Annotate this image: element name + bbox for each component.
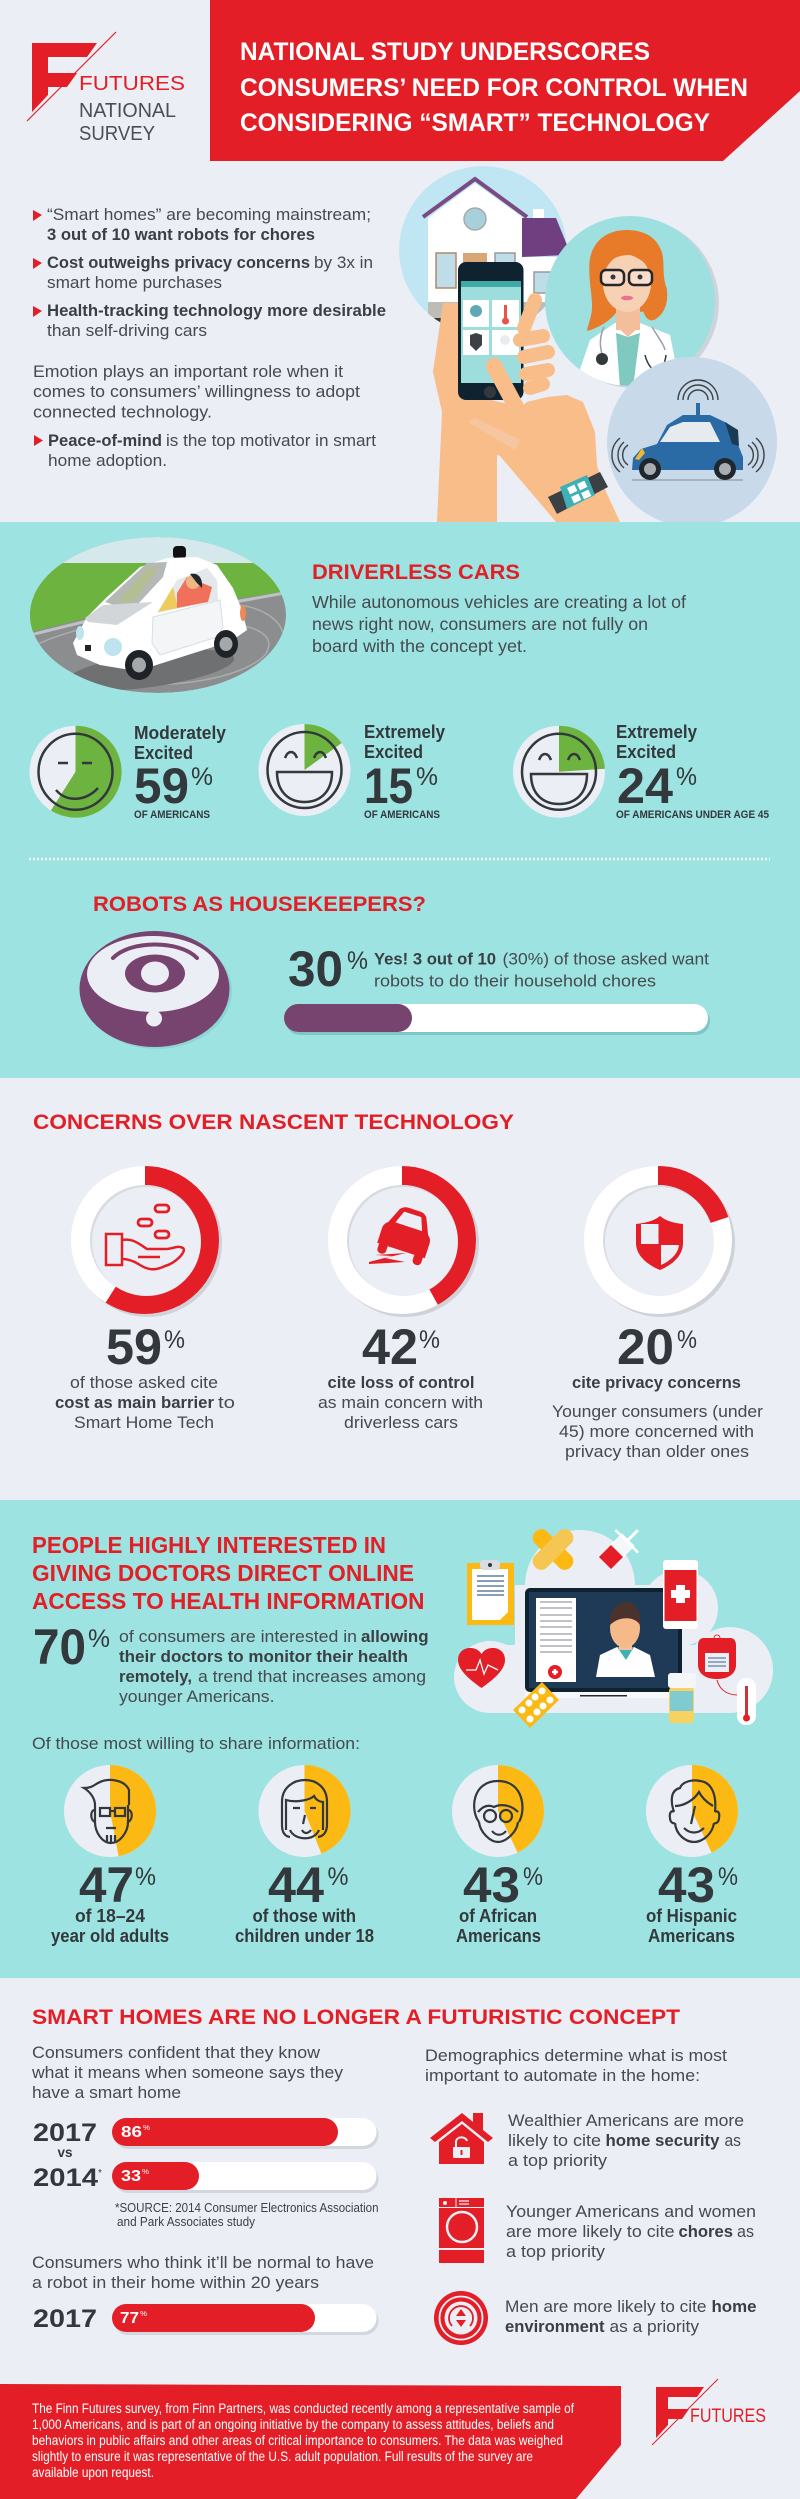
stat: 47% of 18-24: 47 <box>79 1857 134 1913</box>
bar: 2014 33%: * <box>98 2168 102 2179</box>
icon: home environment <box>434 2291 488 2345</box>
stat: 43% African Americans: % <box>523 1863 543 1891</box>
stat: 43% Hispanic Americans: 43 <box>658 1857 715 1913</box>
intro text block: home adoption. <box>48 451 167 470</box>
bar: 2017 86%: 86 <box>121 2124 142 2141</box>
stat: extremely excited under 45 24%: OF AMERICANS UNDER AGE 45 <box>616 809 769 821</box>
stat: 43% African Americans: Americans <box>456 1926 541 1946</box>
text: home security: Wealthier Americans are more <box>508 2111 744 2130</box>
bar: 2014 33% <box>33 2162 378 2193</box>
icon: African American man <box>474 1781 522 1842</box>
intro text block: Health-tracking technology more desirable <box>47 301 386 320</box>
bar: 2017 77% <box>33 2304 378 2335</box>
intro text block: smart home purchases <box>47 273 222 292</box>
heading: health: GIVING DOCTORS DIRECT ONLINE <box>32 1560 414 1586</box>
panel: footer methodology: slightly to ensure it was representative of the U.S. adult population. Full results of the survey are <box>32 2449 533 2464</box>
text: chores: as <box>737 2222 754 2241</box>
heading: health: PEOPLE HIGHLY INTERESTED IN <box>32 1532 386 1558</box>
panel: footer methodology: 1,000 Americans, and is part of an ongoing initiative by the company to assess attitudes, beliefs and <box>32 2417 554 2432</box>
panel: smart homes <box>31 2006 757 2345</box>
fingers over phone <box>494 300 548 418</box>
stat: 59% <box>55 1319 235 1432</box>
text: consumers confident: Consumers confident that they know <box>32 2043 321 2062</box>
stat: 47% of 18-24: year old adults <box>51 1926 169 1946</box>
stat: 30% robots <box>288 941 709 997</box>
text: home environment: as a priority <box>610 2317 699 2336</box>
intro text block: Cost outweighs privacy concerns <box>47 253 310 272</box>
laptop with doctor <box>525 1588 682 1698</box>
logo: Futures footer: FUTURES <box>690 2406 766 2427</box>
pill blister pack <box>513 1682 559 1728</box>
stat: extremely excited under 45 24%: Excited <box>616 742 676 762</box>
panel: footer methodology: The Finn Futures survey, from Finn Partners, was conducted recently among a representative sample of <box>32 2401 574 2416</box>
source note: *SOURCE: 2014 Consumer Electronics Association <box>115 2201 379 2215</box>
intro text block: than self-driving cars <box>47 321 207 340</box>
text: home environment: Men are more likely to cite <box>505 2297 706 2316</box>
bar: 2017 77%: 77 <box>120 2310 139 2327</box>
stat: 30% robots: robots to do their household chores <box>374 972 656 990</box>
stat: extremely excited under 45 24%: 24 <box>617 758 673 814</box>
heading: concerns: CONCERNS OVER NASCENT TECHNOLOGY <box>33 1111 514 1134</box>
intro text block <box>33 205 386 470</box>
stat: extremely excited under 45 24% <box>513 722 769 821</box>
stat: 47% of 18-24: % <box>135 1863 156 1891</box>
text: home security: as <box>724 2131 741 2150</box>
bar: 2017 86%: 2017 <box>33 2119 97 2147</box>
panel: header <box>27 0 800 161</box>
stat: 20%: 45) more concerned with <box>559 1422 754 1441</box>
icon: Hispanic man <box>670 1780 719 1842</box>
source note <box>115 2201 379 2229</box>
icon: bearded man <box>84 1780 132 1843</box>
stat: 70% consumers: allowing <box>361 1627 428 1646</box>
stat: 20%: cite privacy concerns <box>572 1373 741 1392</box>
text: home environment <box>505 2297 756 2336</box>
title banner: CONSUMERS’ NEED FOR CONTROL WHEN <box>240 74 748 102</box>
stat: 42%: 42 <box>362 1319 418 1375</box>
stat: 59%: 59 <box>106 1319 162 1375</box>
stat: extremely excited 15%: Excited <box>364 742 423 762</box>
clipboard <box>467 1560 514 1625</box>
stat: moderately excited 59% <box>30 723 226 821</box>
title banner: NATIONAL STUDY UNDERSCORES <box>240 38 650 66</box>
illustration: telehealth cloud <box>454 1519 773 1728</box>
heading: health: ACCESS TO HEALTH INFORMATION <box>32 1588 424 1614</box>
stat: 43% African Americans: of African <box>459 1906 537 1926</box>
title banner <box>210 0 800 161</box>
intro text block: Emotion plays an important role when it <box>33 362 343 381</box>
text: robot in 20 years: Consumers who think it’ll be normal to have <box>32 2253 374 2272</box>
stat: 44% with children <box>235 1765 374 1946</box>
text: home security <box>508 2111 744 2170</box>
stat: 70% consumers: 70 <box>33 1619 86 1675</box>
logo: Futures National Survey <box>27 32 185 145</box>
ring chart: 42% loss of control <box>328 1166 479 1317</box>
stat: 47% of 18-24: of 18–24 <box>75 1906 145 1926</box>
panel: driverless cars and robots <box>0 522 800 1078</box>
stat: moderately excited 59%: Excited <box>134 743 193 763</box>
stat: 44% with children: of those with <box>252 1906 356 1926</box>
heading: driverless cars: DRIVERLESS CARS <box>312 561 520 584</box>
stat: 42%: as main concern with <box>318 1393 483 1412</box>
stat: 44% with children: % <box>328 1863 348 1891</box>
stat: 70% consumers: younger Americans. <box>119 1687 274 1706</box>
thermometer <box>737 1678 756 1725</box>
icon: woman <box>282 1780 327 1838</box>
panel: footer methodology: behaviors in public affairs and other areas of critical importance to consumers. The data was weighed <box>32 2433 563 2448</box>
stat: 20%: privacy than older ones <box>565 1442 749 1461</box>
intro text block: is the top motivator in smart <box>166 431 376 450</box>
icon: shield <box>636 1216 683 1270</box>
stat: 42%: driverless cars <box>344 1413 458 1432</box>
progress bar: 30% <box>284 1004 710 1035</box>
stat: 70% consumers: of consumers are interested in <box>119 1627 357 1646</box>
heading: robots as housekeepers: ROBOTS AS HOUSEKEEPERS? <box>93 893 426 916</box>
bar: 2014 33%: 2014 <box>33 2164 98 2192</box>
bar: 2017 86%: % <box>143 2125 150 2132</box>
text: demographics: Demographics determine what is most <box>425 2046 727 2065</box>
stat: 70% consumers <box>33 1619 428 1706</box>
stat: 20%: Younger consumers (under <box>552 1402 763 1421</box>
stat: 70% consumers: remotely, <box>119 1667 192 1686</box>
stat: extremely excited under 45 24%: Extremely <box>616 722 697 742</box>
house circle <box>399 166 568 334</box>
text: home security: home security <box>606 2131 720 2150</box>
icon: washing machine <box>439 2198 484 2263</box>
stat: 30% robots: (30%) of those asked want <box>502 950 709 968</box>
stat: 70% consumers: a trend that increases among <box>198 1667 426 1686</box>
stat: moderately excited 59%: % <box>191 763 213 791</box>
stat: moderately excited 59%: OF AMERICANS <box>134 809 210 821</box>
phone: health app <box>663 1560 698 1629</box>
heart with pulse <box>458 1648 505 1688</box>
ring chart: 59% cost <box>71 1166 222 1317</box>
illustration: self-driving car <box>28 535 290 699</box>
icon: skidding car <box>369 1202 438 1267</box>
text: demographics: important to automate in the home: <box>425 2066 700 2085</box>
bar: 2017 77%: 2017 <box>33 2305 97 2333</box>
stat: extremely excited 15%: OF AMERICANS <box>364 809 440 821</box>
bar: 2014 33%: % <box>142 2169 149 2176</box>
text: chores: Younger Americans and women <box>506 2202 756 2221</box>
panel: concerns over nascent technology <box>33 1111 763 1461</box>
stat: 43% Hispanic Americans: Americans <box>648 1926 735 1946</box>
stat: 42%: cite loss of control <box>328 1373 474 1392</box>
intro text block: comes to consumers’ willingness to adopt <box>33 382 360 401</box>
stat: extremely excited under 45 24%: % <box>676 763 697 791</box>
text: of those most willing: Of those most willing to share information: <box>32 1734 360 1753</box>
intro text block: by 3x in <box>314 253 373 272</box>
stat: 42%: % <box>419 1326 440 1354</box>
smartwatch <box>548 472 608 514</box>
driverless cars description: While autonomous vehicles are creating a lot of <box>312 592 686 612</box>
heading: smart homes: SMART HOMES ARE NO LONGER A FUTURISTIC CONCEPT <box>32 2006 680 2029</box>
text: chores: are more likely to cite <box>506 2222 674 2241</box>
stat: 47% of 18-24 <box>51 1765 169 1946</box>
heading: health <box>32 1532 424 1614</box>
stat: 59%: Smart Home Tech <box>74 1413 214 1432</box>
intro text block: 3 out of 10 want robots for chores <box>47 225 315 244</box>
text: home security: a top priority <box>508 2151 608 2170</box>
illustration: connected life (house, doctor, car, hands) <box>399 166 781 528</box>
text: robot in 20 years <box>32 2253 374 2292</box>
stat: 59%: to <box>218 1393 235 1412</box>
text: consumers confident <box>31 2043 344 2102</box>
panel: footer methodology <box>0 2384 621 2499</box>
blood bag and tube <box>698 1635 738 1695</box>
intro text block: “Smart homes” are becoming mainstream; <box>47 205 371 224</box>
stat: 43% African Americans <box>452 1765 544 1946</box>
stat: 20% <box>552 1319 763 1461</box>
stat: extremely excited 15% <box>258 722 445 821</box>
title banner: CONSIDERING “SMART” TECHNOLOGY <box>240 109 710 137</box>
stat: 30% robots: Yes! 3 out of 10 <box>374 950 496 968</box>
label: vs: vs <box>57 2145 73 2160</box>
stat: 30% robots: 30 <box>288 941 343 997</box>
text: home environment: environment <box>505 2317 605 2336</box>
stat: extremely excited 15%: 15 <box>364 758 413 814</box>
intro text block: connected technology. <box>33 402 212 422</box>
stat: 70% consumers: % <box>88 1625 110 1653</box>
driverless cars description <box>312 592 686 656</box>
stat: 42% <box>318 1319 483 1432</box>
text: home environment: home <box>712 2297 756 2316</box>
stat: 59%: % <box>164 1326 185 1354</box>
bar: 2017 86% <box>33 2118 378 2149</box>
stat: extremely excited 15%: % <box>416 763 438 791</box>
logo: Futures National Survey: SURVEY <box>79 123 155 145</box>
source note: and Park Associates study <box>117 2215 256 2229</box>
stat: extremely excited 15%: Extremely <box>364 722 445 742</box>
icon: robot vacuum <box>80 931 232 1049</box>
stat: 43% African Americans: 43 <box>463 1857 520 1913</box>
text: chores <box>506 2202 756 2261</box>
panel: footer methodology: available upon request. <box>32 2465 154 2480</box>
car circle <box>607 357 781 528</box>
text: chores: a top priority <box>506 2242 606 2261</box>
logo: Futures National Survey: FUTURES <box>79 73 185 95</box>
logo: Futures National Survey: NATIONAL <box>79 100 176 122</box>
text: demographics <box>425 2046 727 2085</box>
driverless cars description: news right now, consumers are not fully on <box>312 614 648 634</box>
bar: 2014 33%: 33 <box>121 2168 141 2185</box>
text: chores: chores <box>678 2222 733 2241</box>
smartphone <box>458 262 524 400</box>
stat: 20%: 20 <box>617 1319 674 1375</box>
icon: hand and coins <box>106 1205 184 1269</box>
stat: 59%: cost as main barrier <box>55 1393 214 1412</box>
hands holding phone <box>433 303 620 522</box>
text: consumers confident: what it means when someone says they <box>31 2063 344 2082</box>
icon: home security <box>430 2113 493 2164</box>
stat: 20%: % <box>677 1326 697 1354</box>
stat: moderately excited 59%: 59 <box>134 758 189 814</box>
text: home security: likely to cite <box>508 2131 601 2150</box>
stat: 44% with children: 44 <box>268 1857 324 1913</box>
text: robot in 20 years: a robot in their home within 20 years <box>32 2273 319 2292</box>
ring chart: 20% privacy <box>584 1166 735 1317</box>
intro text block: Peace-of-mind <box>48 431 162 450</box>
stat: 30% robots: % <box>347 947 368 975</box>
text: consumers confident: have a smart home <box>32 2083 181 2102</box>
panel: health information <box>0 1500 800 1978</box>
stat: moderately excited 59%: Moderately <box>134 723 226 743</box>
bandage <box>529 1526 577 1573</box>
stat: 43% Hispanic Americans: % <box>718 1863 738 1891</box>
syringe <box>594 1519 649 1574</box>
bar: 2017 77%: % <box>140 2311 147 2318</box>
stat: 70% consumers: their doctors to monitor their health <box>119 1647 408 1666</box>
stat: 43% Hispanic Americans: of Hispanic <box>646 1906 737 1926</box>
doctor circle <box>545 216 719 392</box>
stat: 43% Hispanic Americans <box>646 1765 738 1946</box>
stat: 59%: of those asked cite <box>70 1373 218 1392</box>
logo: Futures footer <box>652 2379 766 2445</box>
driverless cars description: board with the concept yet. <box>312 636 527 656</box>
stat: 44% with children: children under 18 <box>235 1926 374 1946</box>
pill bottle <box>668 1673 696 1723</box>
